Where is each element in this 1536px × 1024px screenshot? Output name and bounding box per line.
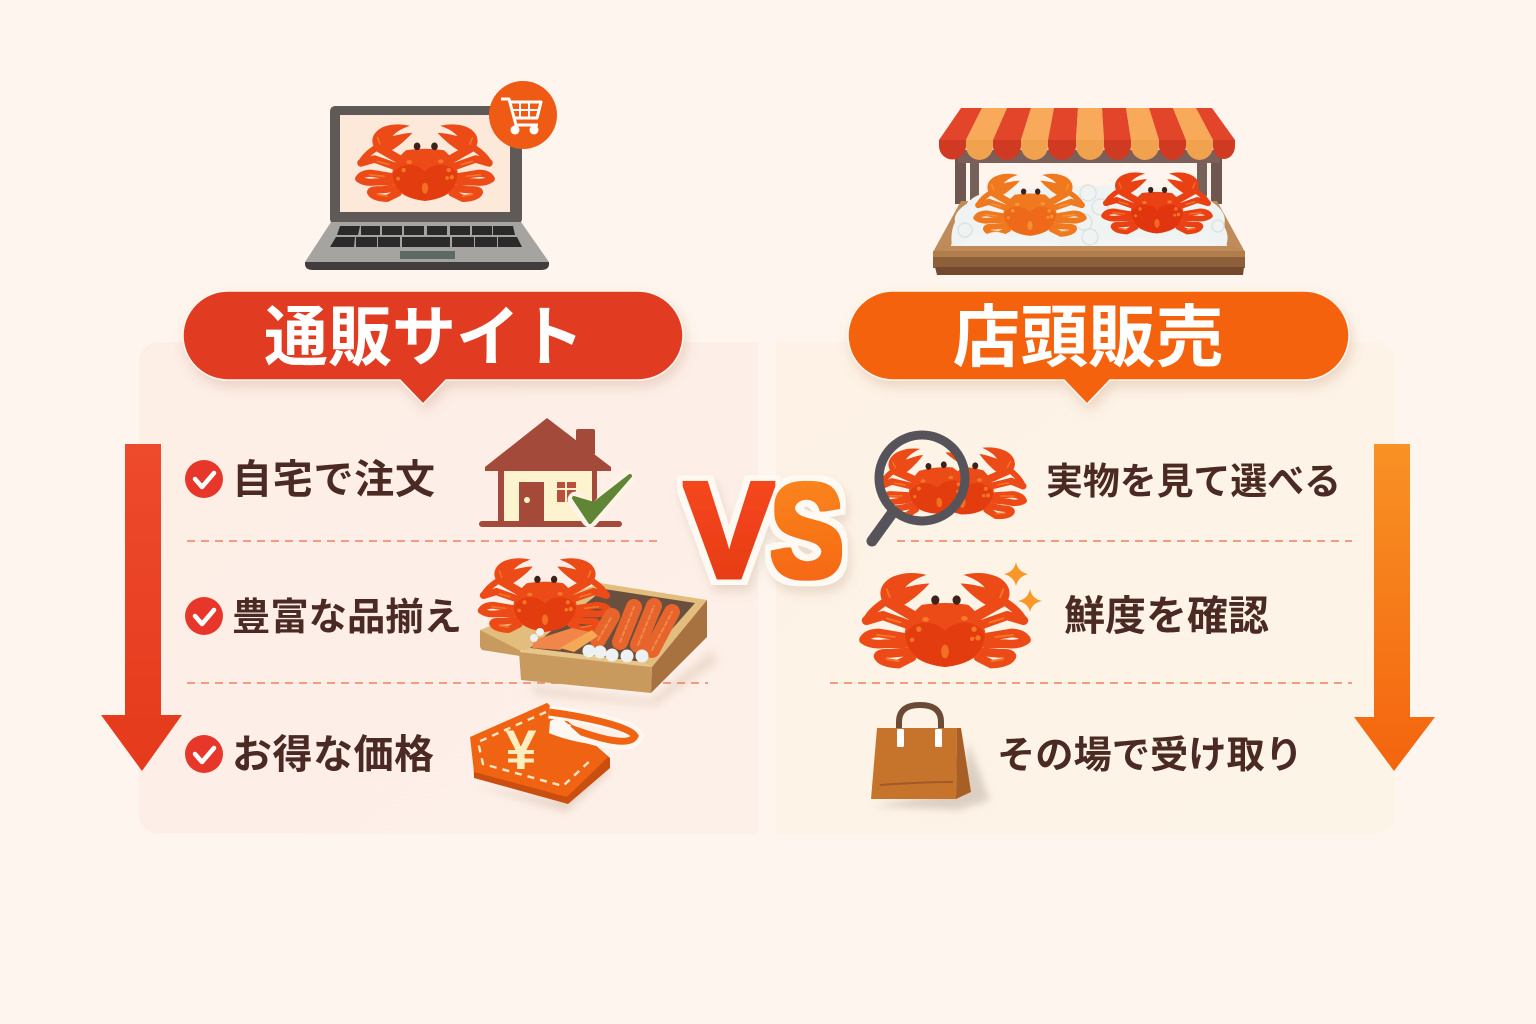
check badge — [185, 735, 223, 773]
arrow: left down arrow — [101, 444, 182, 771]
heading text: 通販サイト — [264, 300, 584, 374]
label: 鮮度を確認 — [1064, 593, 1269, 639]
icon: shopping cart badge — [489, 81, 557, 149]
row: good price — [185, 733, 434, 777]
red crab — [1104, 172, 1210, 233]
row: see the real thing — [872, 435, 1341, 541]
icon: magnifying glass — [866, 430, 970, 546]
heading: mail order pill — [183, 291, 683, 404]
icon: large crab — [864, 573, 1026, 667]
icon: sparkles — [1004, 562, 1042, 612]
check badge — [185, 597, 223, 635]
crab on laptop screen — [359, 124, 491, 201]
icon: yen price tag: ¥ — [505, 718, 537, 781]
orange crab — [976, 174, 1084, 236]
icon: market stall with crabs on ice — [933, 108, 1245, 275]
row: check freshness — [864, 562, 1269, 667]
arrow: right down arrow — [1354, 444, 1435, 771]
label: 自宅で注文 — [232, 458, 435, 502]
icon: house with check — [479, 418, 630, 527]
panel: mail order background — [139, 342, 758, 834]
row: take it home immediately — [871, 705, 1303, 810]
vs mark — [684, 454, 844, 606]
letter V: V — [684, 454, 774, 606]
awning — [939, 108, 1235, 160]
label: 豊富な品揃え — [232, 597, 462, 639]
row: wide selection — [185, 597, 462, 639]
label: その場で受け取り — [997, 735, 1303, 777]
crab behind magnifier — [901, 439, 1029, 521]
panel: in-store background — [776, 342, 1395, 834]
icon: shopping bag — [871, 705, 990, 810]
label: お得な価格 — [232, 733, 434, 777]
divider lines — [187, 541, 1352, 683]
row: home ordering — [185, 458, 435, 502]
check badge — [185, 460, 223, 498]
icon: seafood box with crab — [480, 558, 718, 706]
letter S: S — [770, 457, 844, 606]
label: 実物を見て選べる — [1046, 461, 1341, 502]
crab on box — [481, 558, 609, 632]
icon: yen price tag — [470, 703, 637, 812]
heading text: 店頭販売 — [952, 300, 1224, 376]
icon: laptop with crab on screen — [305, 106, 549, 270]
heading: in-store pill — [848, 291, 1349, 404]
